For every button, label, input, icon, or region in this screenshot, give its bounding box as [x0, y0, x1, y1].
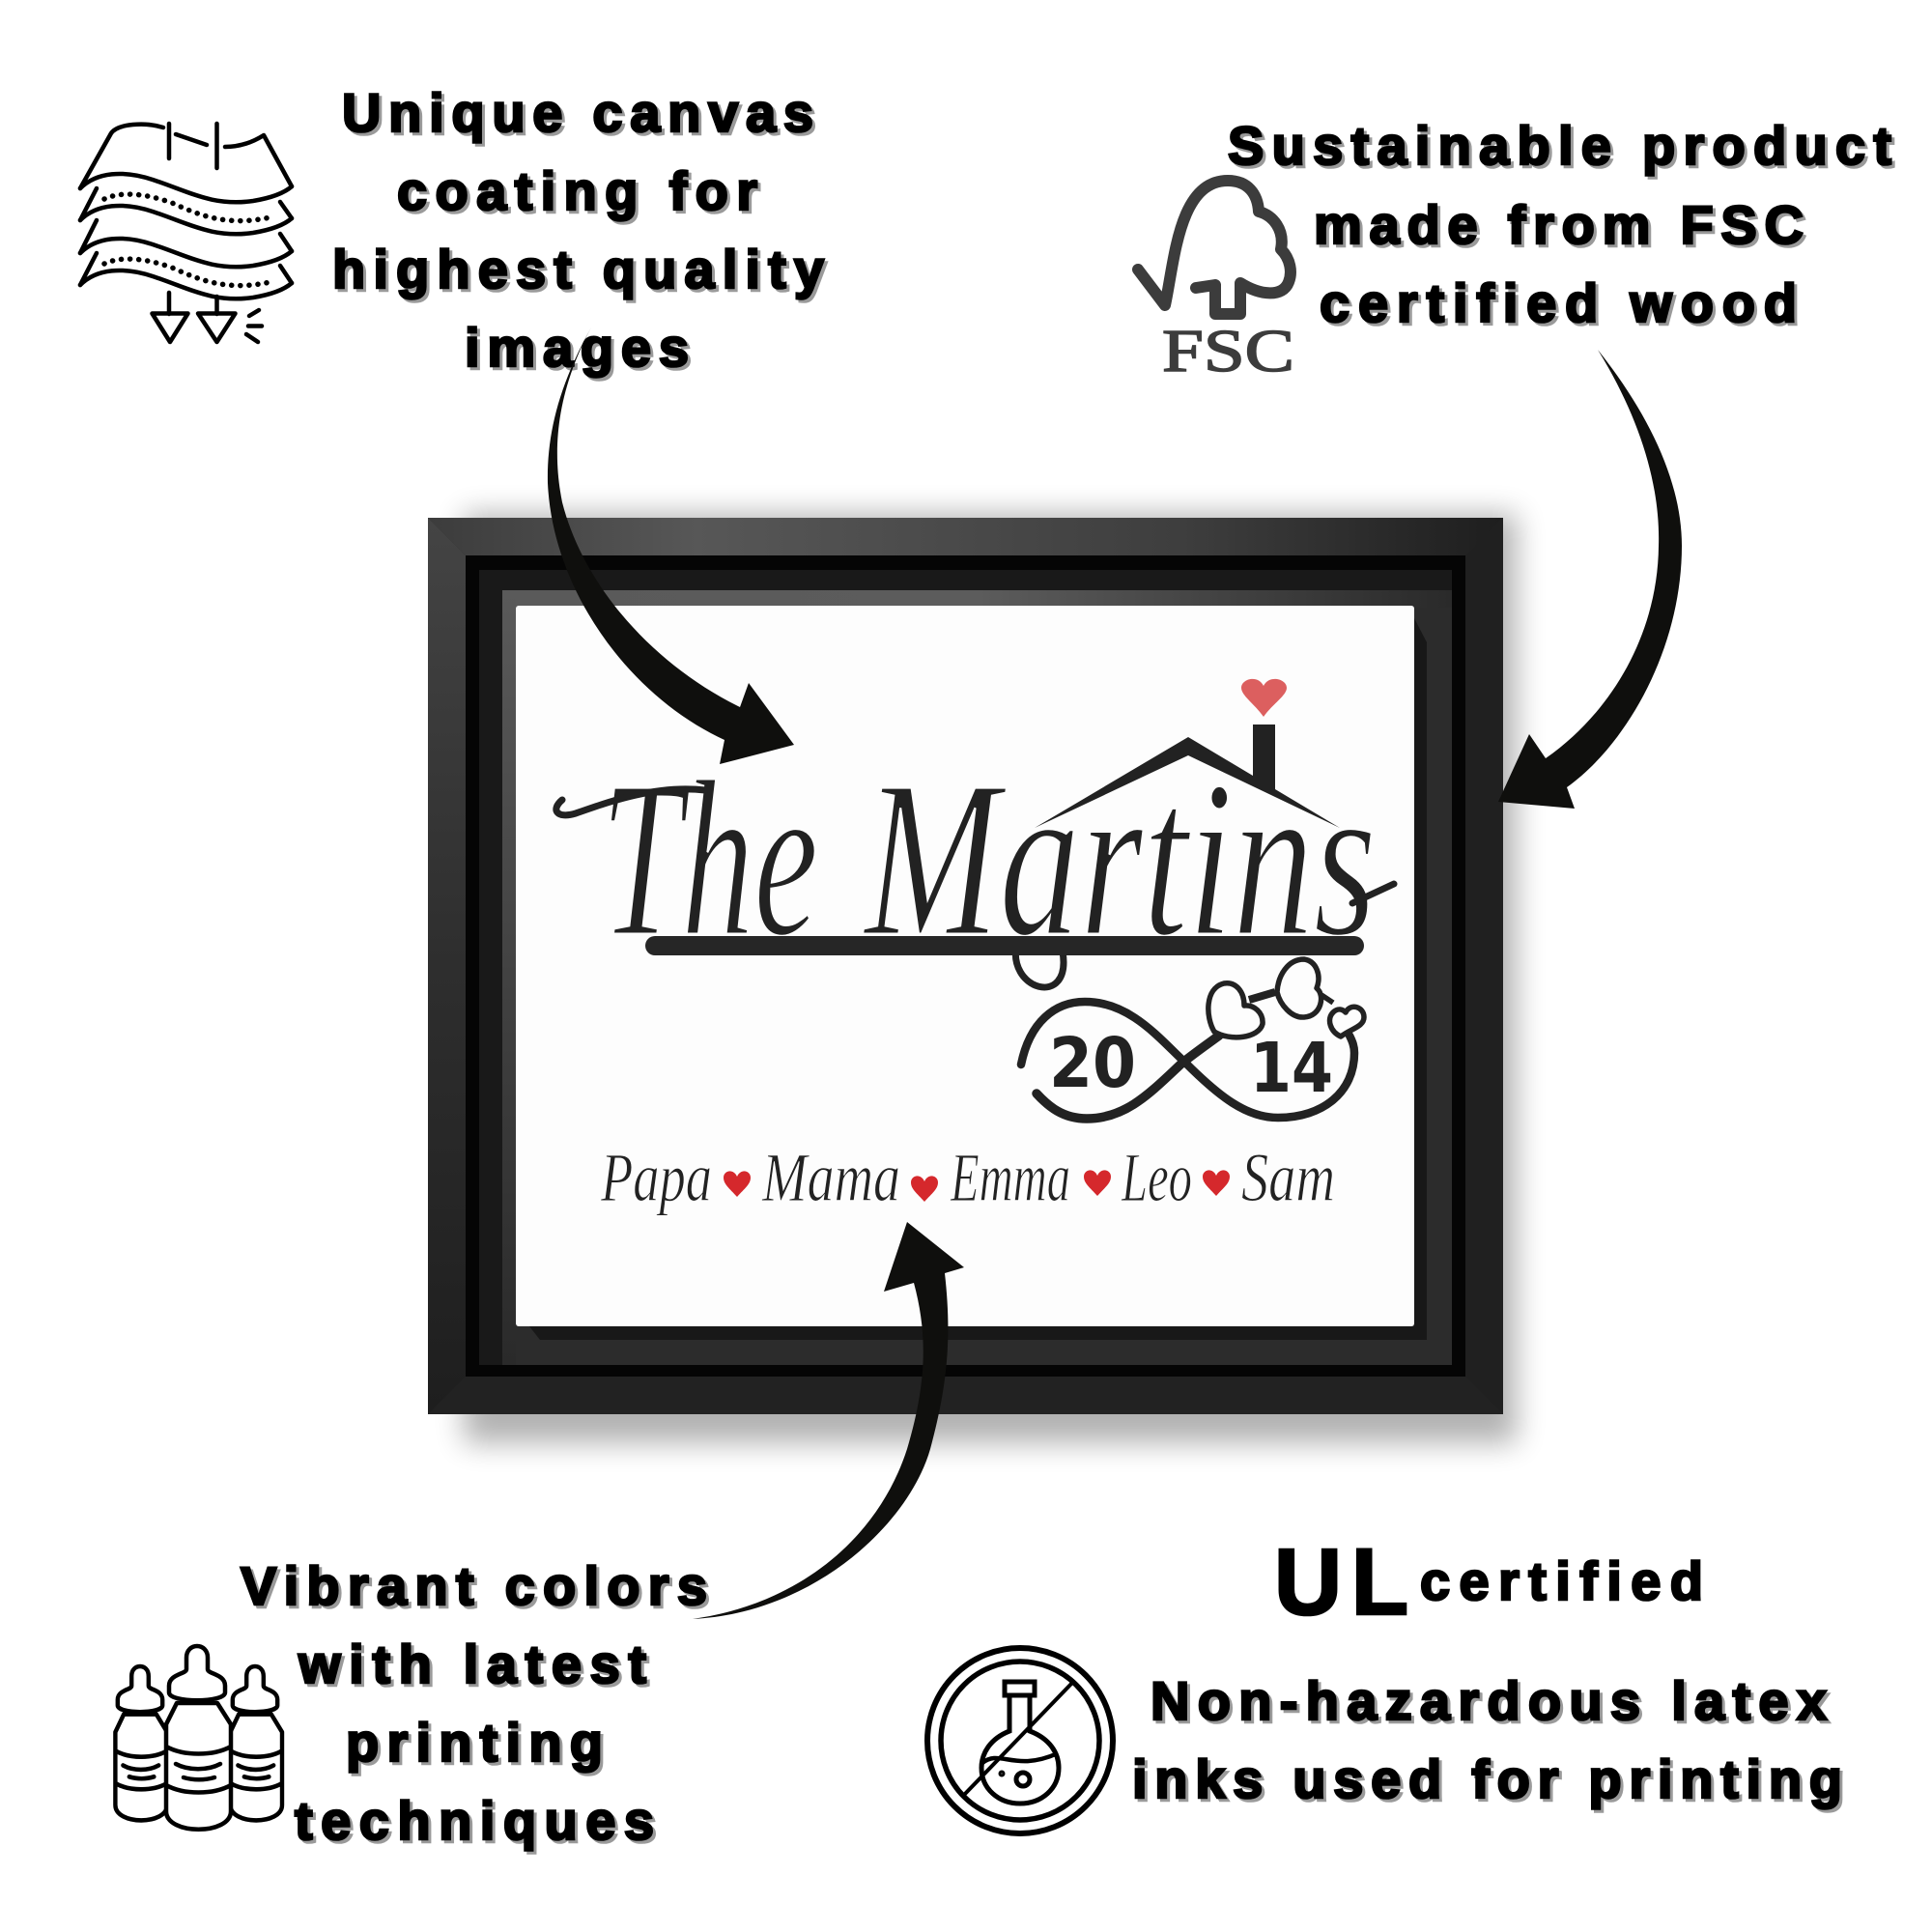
text: canvas coating: images [465, 317, 689, 378]
text: canvas coating: highest quality [332, 239, 824, 299]
red hearts [724, 1170, 1230, 1202]
right bottle [230, 1666, 282, 1820]
year digits [1049, 1023, 1333, 1108]
icon: coating layers [80, 124, 292, 342]
text: vibrant colors: printing [346, 1712, 603, 1773]
text: canvas coating: Unique canvas [342, 82, 813, 143]
icon: FSC tree check logo [1138, 181, 1294, 384]
canvas print [516, 606, 1414, 1326]
year infinity emblem [1021, 959, 1364, 1119]
icon: no hazardous chemicals [927, 1648, 1113, 1833]
family names row: Mama [761, 1139, 900, 1216]
text: sustainable product: certified wood [1320, 272, 1797, 333]
text: UL certified: certified [1420, 1550, 1703, 1611]
text: canvas coating: coating for [397, 160, 757, 221]
text: UL certified: UL [1274, 1529, 1408, 1634]
title swash strokes [556, 789, 1394, 987]
text: sustainable product [1228, 115, 1891, 333]
text: non-hazardous inks: Non-hazardous latex [1151, 1670, 1827, 1731]
left bottle [115, 1666, 167, 1820]
text: sustainable product: made from FSC [1314, 194, 1804, 255]
house roof with chimney [1035, 724, 1340, 828]
script title: The [601, 735, 818, 983]
family names row [600, 1139, 1335, 1216]
text: non-hazardous inks: inks used for printing [1132, 1748, 1842, 1809]
text: vibrant colors: techniques [295, 1790, 654, 1851]
family names row: Emma [950, 1139, 1070, 1216]
FSC wordmark: FSC [1162, 319, 1294, 384]
center bottle [166, 1646, 231, 1830]
arrow: FSC wood [1498, 350, 1682, 809]
arrow: canvas coating [548, 327, 794, 764]
script title: Martins [863, 735, 1377, 983]
text: sustainable product: Sustainable product [1228, 115, 1891, 176]
family names row: Papa [600, 1139, 712, 1216]
text: vibrant colors: Vibrant colors [241, 1555, 707, 1616]
arrow: vibrant colors [693, 1222, 964, 1619]
family names row: Leo [1121, 1139, 1192, 1216]
framed canvas product [428, 514, 1517, 1443]
script title [601, 735, 1377, 983]
key hearts [1208, 959, 1364, 1037]
text: vibrant colors: with latest [298, 1634, 646, 1694]
canvas artwork: family name [556, 679, 1394, 987]
underline bar [645, 936, 1364, 955]
text: non-hazardous inks [1132, 1670, 1842, 1809]
text: vibrant colors [241, 1555, 707, 1851]
text: UL certified [1274, 1529, 1703, 1634]
text: canvas coating [332, 82, 824, 378]
icon: ink bottles [115, 1646, 282, 1830]
icon: heart above chimney [1241, 679, 1287, 717]
year digits: 14 [1250, 1028, 1333, 1108]
family names row: Sam [1241, 1139, 1335, 1216]
year digits: 20 [1049, 1023, 1136, 1103]
